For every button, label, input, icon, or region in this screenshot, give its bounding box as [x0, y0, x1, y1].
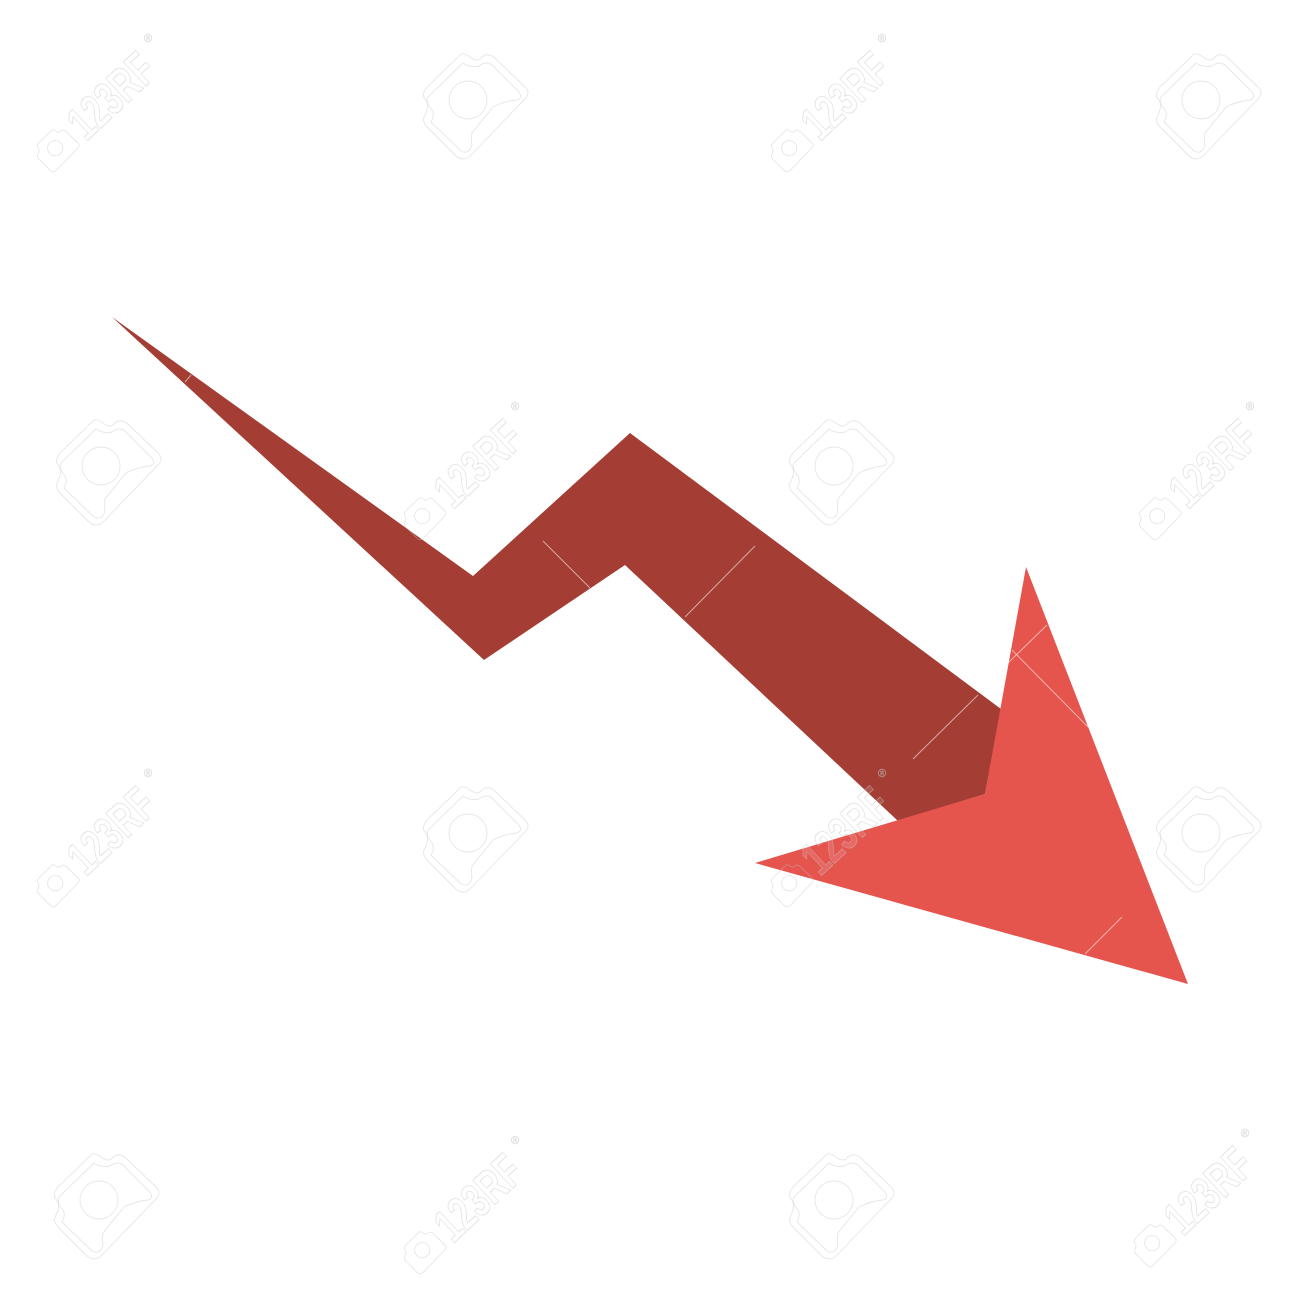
watermark logo 2: ® [878, 33, 886, 45]
watermark logo 6: ® [878, 768, 886, 780]
watermark logo 2 [771, 33, 901, 172]
watermark icon 5 [423, 787, 528, 892]
watermark logo 3 [404, 401, 534, 540]
watermark icon 4 [789, 420, 894, 525]
watermark logo 5 [37, 768, 167, 907]
watermark logo 6: 123RF [791, 778, 901, 885]
watermark icon 1 [423, 54, 528, 159]
watermark icon 8 [789, 1154, 894, 1259]
watermark logo 3: 123RF [424, 411, 534, 518]
watermark logo 8: 123RF [1154, 1138, 1264, 1245]
watermark logo 7: 123RF [424, 1145, 534, 1252]
watermark icon 6 [1156, 787, 1261, 892]
fine scratch lines across the arrow [185, 375, 1122, 954]
watermark logo 8: ® [1241, 1128, 1249, 1140]
watermark icon 2 [1156, 54, 1261, 159]
arrow head: light red triangle [755, 567, 1188, 984]
watermark icon 3 [56, 420, 161, 525]
arrow shaft: dark red zigzag [112, 317, 1001, 821]
watermark logo 7 [404, 1135, 534, 1274]
watermark logo 1 [37, 33, 167, 172]
watermark logo 5: 123RF [57, 778, 167, 885]
watermark icon 7 [54, 1154, 159, 1259]
watermark logo 1: ® [144, 33, 152, 45]
watermark logo 3: ® [511, 401, 519, 413]
watermark logo 6 [771, 768, 901, 907]
watermark logo 4: ® [1246, 401, 1254, 413]
watermark logo 4: 123RF [1159, 411, 1269, 518]
watermark logo 1: 123RF [57, 43, 167, 150]
watermark logo 8 [1134, 1128, 1264, 1267]
watermark logo 4 [1139, 401, 1269, 540]
watermark logo 5: ® [144, 768, 152, 780]
watermark logo 2: 123RF [791, 43, 901, 150]
watermark logo 7: ® [511, 1135, 519, 1147]
